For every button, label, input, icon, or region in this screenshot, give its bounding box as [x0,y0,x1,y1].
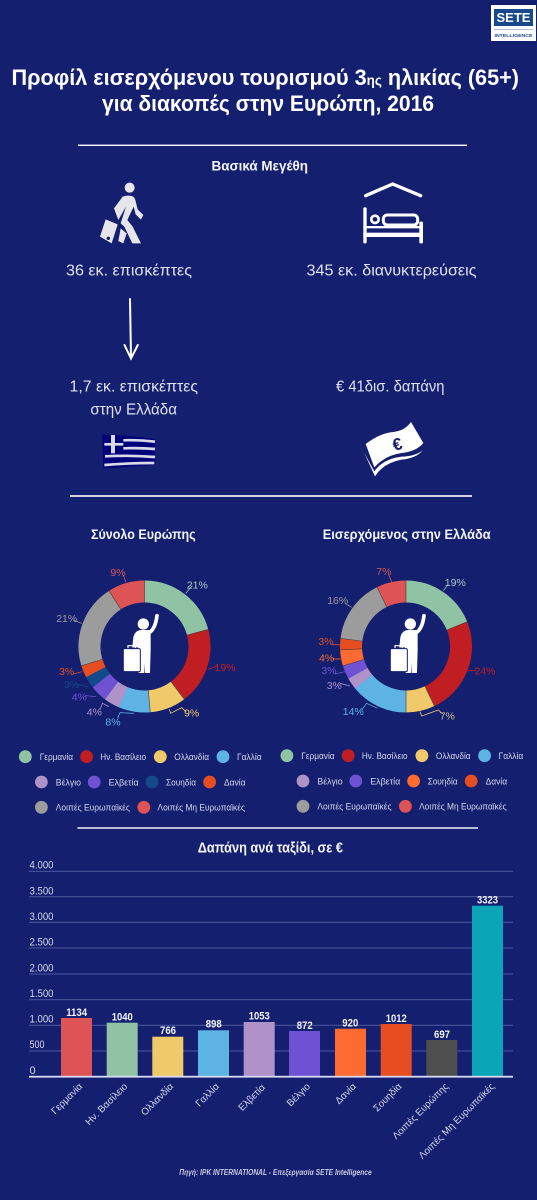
bar category labels: Βέλγιο [285,1081,313,1109]
bar value labels: 1040 [112,1012,133,1024]
legend: inbound to Greece: Λοιπές Ευρωπαϊκές [317,802,392,813]
legend: inbound to Greece: Ην. Βασίλειο [362,751,408,762]
bar value labels: 3323 [477,894,498,906]
donut chart: inbound to Greece [318,566,496,724]
heading: spending per trip: Δαπάνη ανά ταξίδι, σε € [198,840,344,857]
percent labels: inbound to Greece: 19% [445,577,466,589]
legend: inbound to Greece: Γερμανία [301,751,335,762]
bar value labels: 898 [206,1019,222,1031]
bar value labels: 766 [160,1025,176,1037]
bar chart: spending per trip [29,860,513,1162]
bar value labels: 1012 [386,1013,407,1025]
bar value labels: 697 [434,1029,450,1041]
percent labels: inbound to Greece: 3% [318,636,334,648]
y axis labels [30,860,54,1077]
bar category labels: Γαλλία [194,1081,222,1109]
legend: inbound to Greece: Δανία [486,776,508,787]
bar category labels: Λοιπές Ευρώπης [391,1081,451,1142]
percent labels: total Europe: 9% [110,567,126,579]
stat: spending: € 41δισ. δαπάνη [336,379,444,396]
legend: total Europe: Λοιπές Ευρωπαϊκές [56,803,130,814]
icon: waving traveller with suitcase [123,616,157,673]
legend: total Europe: Ελβετία [109,777,139,788]
y axis labels: 1.000 [30,1014,54,1026]
percent labels: inbound to Greece: 14% [343,706,364,718]
title: Προφίλ εισερχόμενου τουρισμού 3ης ηλικίας (65+) [12,65,519,90]
legend: total Europe: Δανία [224,777,246,788]
legend: total Europe: Γερμανία [40,752,73,763]
y axis labels: 4.000 [30,860,54,872]
percent labels: total Europe: 3% [59,666,74,678]
y axis labels: 2.500 [30,936,54,948]
legend: inbound to Greece: Ολλανδία [436,751,471,762]
legend: total Europe: Ην. Βασίλειο [100,752,146,763]
legend: inbound to Greece: Γαλλία [499,751,524,762]
stat: visitors to Greece: στην Ελλάδα [90,401,177,418]
legend: inbound to Greece: Λοιπές Μη Ευρωπαϊκές [419,802,507,813]
bar value labels: 920 [342,1018,358,1030]
bar value labels: 1053 [249,1011,270,1023]
percent labels: inbound to Greece: 7% [376,566,392,578]
icon: euro banknotes: € [390,434,405,455]
y axis labels: 0 [30,1065,36,1077]
percent labels: total Europe: 3% [64,679,79,691]
y axis labels: 3.500 [30,885,54,897]
title [12,65,519,116]
bar value labels: 1134 [66,1007,88,1019]
legend: inbound to Greece: Σουηδία [428,776,458,787]
arrow: down to Greece [124,299,138,358]
logo: SETE Intelligence: SETE [496,10,531,25]
percent labels: total Europe: 21% [56,613,77,625]
legend: total Europe: Βέλγιο [56,777,81,788]
bar category labels: Δανία [333,1081,359,1107]
bar value labels [66,894,498,1041]
bar category labels: Γερμανία [49,1081,85,1117]
percent labels: inbound to Greece: 24% [474,666,496,678]
legend: inbound to Greece: Βέλγιο [317,776,343,787]
legend: total Europe: Λοιπές Μη Ευρωπαϊκές [158,803,245,814]
bar category labels: Ολλανδία [139,1081,176,1118]
percent labels: total Europe [56,567,236,728]
legend: total Europe: Γαλλία [237,752,262,763]
title: για διακοπές στην Ευρώπη, 2016 [102,91,434,116]
y axis labels: 500 [30,1039,44,1051]
percent labels: total Europe: 4% [72,692,87,704]
percent labels: inbound to Greece: 3% [321,665,337,677]
stat: visitors to Greece [70,379,198,418]
percent labels: total Europe: 19% [214,662,236,674]
icon: traveller with luggage [100,183,143,243]
y axis labels: 2.000 [30,962,54,974]
source note: Πηγή: IPK INTERNATIONAL - Επεξεργασία SETE Intelligence [179,1168,372,1177]
percent labels: total Europe: 21% [187,580,208,592]
stat: visitors: 36 εκ. επισκέπτες [66,263,192,280]
bar category labels: Ην. Βασίλειο [84,1081,131,1128]
leader lines: total Europe [73,575,217,718]
percent labels: inbound to Greece: 4% [319,652,334,664]
percent labels: inbound to Greece: 7% [440,710,455,722]
logo: SETE Intelligence: INTELLIGENCE [494,33,532,38]
percent labels: inbound to Greece: 16% [327,595,348,607]
y axis labels: 3.000 [30,911,54,923]
percent labels: inbound to Greece [318,566,496,722]
icon: euro banknotes [364,422,423,476]
bar value labels: 872 [297,1020,313,1032]
stat: visitors to Greece: 1,7 εκ. επισκέπτες [70,379,198,396]
percent labels: total Europe: 9% [184,708,199,720]
percent labels: total Europe: 4% [87,706,102,718]
leader lines: inbound to Greece [332,574,477,716]
icon: Greek flag [102,434,155,468]
icon: bed under roof [363,184,423,243]
bar category labels: Ελβετία [237,1082,268,1114]
legend: inbound to Greece: Ελβετία [370,776,401,787]
percent labels: total Europe: 8% [105,716,121,728]
bars [61,906,503,1077]
heading: total Europe: Σύνολο Ευρώπης [91,526,196,542]
stat: overnight stays: 345 εκ. διανυκτερεύσεις [306,263,477,280]
y axis labels: 1.500 [30,988,54,1000]
legend: total Europe: Σουηδία [166,777,196,788]
icon: waving traveller with suitcase [390,616,424,673]
percent labels: inbound to Greece: 3% [327,680,342,692]
legend: total Europe [19,750,262,814]
legend: inbound to Greece [280,749,524,813]
legend: total Europe: Ολλανδία [174,752,209,763]
heading: inbound to Greece: Εισερχόμενος στην Ελλάδα [323,526,491,542]
bar category labels: Λοιπές Μη Ευρωπαϊκές [417,1081,497,1162]
bar category labels [49,1081,497,1162]
logo: SETE Intelligence [491,5,536,41]
donut chart: total Europe [56,567,236,728]
bar category labels: Σουηδία [371,1081,405,1114]
heading: key figures: Βασικά Μεγέθη [212,158,308,174]
